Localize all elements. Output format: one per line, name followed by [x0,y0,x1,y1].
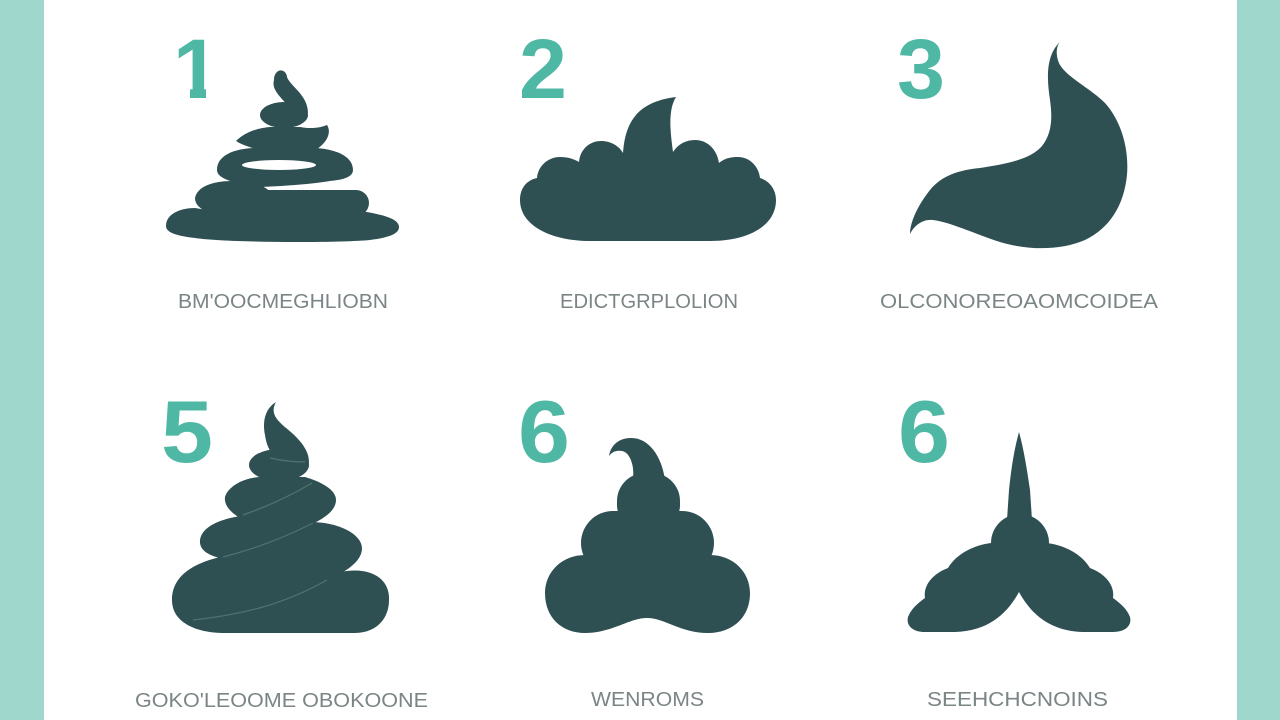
number 3: 3 [897,22,945,116]
number 1: 1 [173,22,220,116]
icon: rounded tiered mound with hook [545,438,750,633]
label 1: BM'OOCMEGHLIOBN [178,291,388,313]
number 5: 5 [161,382,213,481]
icon: cloud mound with fin [520,97,776,241]
number 6: 6 [518,382,570,481]
label 6 centre: WENROMS [591,689,704,711]
icon: coiled spiral mound [166,70,399,242]
panel: item 3 [880,22,1159,313]
label 3: OLCONOREOAOMCOIDEA [880,291,1159,313]
panel: item 1 [166,22,399,313]
number 6: 6 [898,382,950,481]
left teal side band [0,0,44,720]
panel: item 2 [519,22,776,313]
label 2: EDICTGRPLOLION [560,291,738,313]
right teal side band [1237,0,1280,720]
label 6 right: SEEHCHCNOINS [927,689,1108,711]
icon: stacked swirl mound [172,402,389,633]
panel: item 6 (right) [898,382,1130,711]
number 2: 2 [519,22,567,116]
label 5: GOKO'LEOOME OBOKOONE [135,690,428,712]
panel: item 6 (centre) [518,382,750,711]
icon: spire with two lobes [908,432,1130,632]
panel: item 5 [135,382,428,712]
icon: curved teardrop [910,41,1127,248]
